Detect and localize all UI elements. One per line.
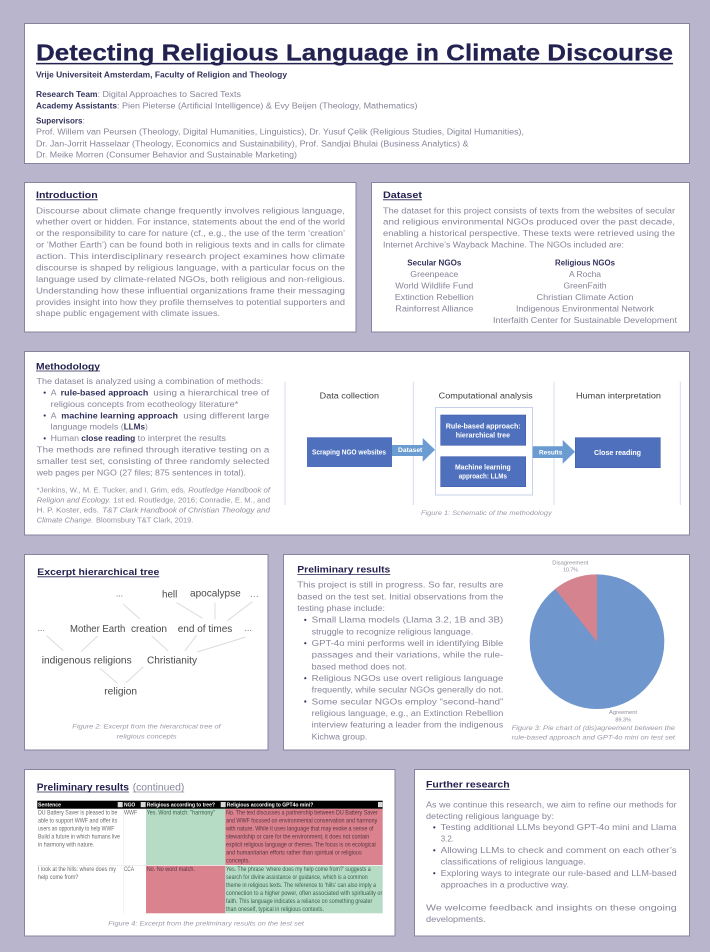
table header (37, 801, 383, 809)
further research text: 3.2. (441, 834, 454, 844)
table row 1: WWF (124, 810, 138, 816)
table row 1: users an opportunity to help WWF (38, 826, 115, 832)
arrow: dataset: Dataset (398, 447, 423, 454)
list: secular NGOs: Rainforrest Alliance (395, 303, 474, 313)
methodology text: A (51, 387, 57, 397)
academy assistants: : Pien Pieterse (Artificial Intelligence) & Evy Beijen (Theology, Mathematics) (117, 100, 418, 110)
chart: methodology schematic (285, 382, 680, 517)
panel: preliminary results continued (24, 770, 395, 936)
container: computational methods (436, 408, 532, 495)
further research text (426, 799, 677, 924)
dataset text: and religious environmental NGOs produced over the past decade, (383, 217, 675, 227)
academy assistants: Academy Assistants (36, 100, 117, 110)
table row 1: and WWF focused on environmental conservation and harmony (226, 818, 377, 824)
table row 1: able to support WWF and offer its (38, 818, 117, 824)
box: close reading (575, 438, 660, 468)
further research text: detecting religious language by: (426, 811, 554, 821)
list: secular NGOs: Extinction Rebellion (395, 292, 474, 302)
caption: figure 3: Figure 3: Pie chart of (dis)agreement between the (512, 725, 675, 732)
list: religious NGOs: Religious NGOs (555, 258, 615, 268)
panel: header (24, 24, 690, 164)
further research text: classifications of religious language. (441, 857, 586, 867)
pie label: disagreement (552, 560, 589, 573)
table row 1: stewardship or care for the environment, it does not contain (226, 834, 369, 840)
introduction text: or ‘Mother Earth’) can be found both in religious texts and in calls for climate (36, 240, 345, 250)
caption: figure 2: religious concepts (117, 733, 177, 740)
introduction text: action. This interdisciplinary research project examines how climate (36, 251, 345, 261)
preliminary results text: Small Llama models (Llama 3.2, 1B and 3B) (312, 615, 503, 625)
table row 1: concepts. (226, 858, 250, 864)
panel: methodology (24, 352, 690, 535)
pie label: disagreement: Disagreement (552, 560, 589, 566)
dataset text (383, 205, 675, 250)
box: machine learning approach: Machine learning (455, 462, 511, 471)
box: rule-based approach (441, 415, 526, 445)
heading: dataset: Dataset (383, 190, 423, 201)
chart: concept tree: indigenous religions (42, 655, 132, 666)
methodology text: close reading (81, 433, 135, 443)
table row 1: explicit religious language or themes. The focus is on ecological (226, 842, 376, 848)
pie label: agreement: 89.3% (615, 717, 631, 723)
table row 2: faith. This language indicates a reliance on something greater (226, 899, 372, 905)
heading: further research: Further research (426, 780, 510, 791)
preliminary results text: passages and their variations, while the rule- (312, 650, 503, 660)
further research text: Testing additional LLMs beyond GPT-4o mini and Llama (441, 822, 677, 832)
table row 2: I look at the hills: where does my (38, 867, 116, 873)
preliminary results text (297, 580, 504, 741)
table row 1: Build a future in which humans live (38, 834, 121, 840)
preliminary results text: GPT-4o mini performs well in identifying Bible (312, 638, 504, 648)
further research text: Exploring ways to integrate our rule-based and LLM-based (441, 868, 677, 878)
introduction text: or the responsibility to care for nature (cf., e.g., the use of the term ‘creation’ (36, 228, 345, 238)
chart: concept tree: ... (244, 623, 252, 634)
caption: figure 1: Figure 1: Schematic of the methodology (421, 510, 552, 517)
table row 1: DU Battery Saver is pleased to be (38, 810, 118, 816)
introduction text: Understanding how these influential organizations frame their messaging (36, 285, 345, 295)
chart: concept tree: end of times (178, 624, 232, 635)
introduction text: Discourse about climate change frequently involves religious language, (36, 205, 345, 215)
methodology text: to interpret the results (138, 433, 226, 443)
supervisors: Dr. Meike Morren (Consumer Behavior and Sustainable Marketing) (36, 150, 297, 160)
list: secular NGOs: World Wildlife Fund (395, 280, 474, 290)
preliminary results text: testing phase include: (297, 603, 385, 613)
preliminary results text: struggle to recognize religious language. (312, 626, 473, 636)
preliminary results text: frequently, while secular NGOs generally do not. (312, 685, 503, 695)
caption: figure 4: Figure 4: Excerpt from the preliminary results on the test set (108, 921, 305, 928)
column label: human interpretation: Human interpretation (576, 390, 661, 400)
chart: concept tree (37, 589, 259, 697)
list: religious NGOs: Christian Climate Action (536, 292, 634, 302)
preliminary results text: Kichwa group. (312, 731, 367, 741)
table header: Religious according to GPT4o mini? (227, 802, 314, 808)
box: machine learning approach: approach: LLMs (459, 472, 507, 481)
supervisors: Prof. Willem van Peursen (Theology, Digital Humanities, Linguistics), Dr. Yusuf Çelik (Religious Studies, Digital Humanities), (36, 127, 524, 137)
pie label: agreement: Agreement (609, 710, 638, 716)
footnote references: *Jenkins, W., M. E. Tucker, and I. Grim, eds. (37, 488, 186, 495)
heading: preliminary results continued: Preliminary results (37, 782, 129, 793)
list: religious NGOs: GreenFaith (564, 280, 607, 290)
list: religious NGOs: A Rocha (569, 269, 601, 279)
preliminary results text: religious language, e.g., an Extinction Rebellion (312, 708, 504, 718)
preliminary results text: Some secular NGOs employ “second-hand” (312, 696, 503, 706)
methodology text: The dataset is analyzed using a combination of methods: (36, 376, 263, 386)
further research text: approaches in a productive way. (441, 880, 569, 890)
footnote references: 1st ed. Routledge, 2016; Conradie, E. M., and (113, 498, 270, 505)
further research text: Allowing LLMs to check and comment on each other’s (441, 845, 677, 855)
caption: figure 3: rule-based approach and GPT-4o mini on test set (512, 734, 676, 741)
box: scraping NGO websites: Scraping NGO websites (312, 447, 386, 456)
chart: concept tree: ... (37, 623, 45, 634)
introduction text: shape public engagement with climate issues. (36, 308, 220, 318)
methodology text: using a hierarchical tree of (153, 387, 270, 397)
footnote references: H. P. Koster, eds. (37, 508, 99, 515)
introduction text (35, 205, 345, 318)
list: religious NGOs: Indigenous Environmental Network (516, 303, 655, 313)
caption: figure 2 (72, 723, 222, 740)
table row 2: than oneself, typical in religious contexts. (226, 907, 324, 913)
arrow: results (533, 440, 575, 464)
methodology text: machine learning approach (61, 410, 178, 420)
box: machine learning approach (441, 457, 526, 487)
pie label: agreement (609, 710, 638, 723)
introduction text: discourse is shaped by religious language, with a particular focus on the (36, 262, 345, 272)
methodology text: Human (51, 433, 79, 443)
supervisors (36, 115, 524, 160)
list: religious NGOs: Interfaith Center for Sustainable Development (493, 315, 678, 325)
affiliation: Vrije Universiteit Amsterdam, Faculty of Religion and Theology (36, 70, 287, 80)
table row 1: and humanitarian efforts rather than spiritual or religious (226, 850, 362, 856)
methodology text: religious concepts from ecotheology literature* (51, 399, 239, 409)
panel: introduction (24, 182, 356, 332)
caption: figure 2: Figure 2: Excerpt from the hierarchical tree of (72, 723, 222, 730)
methodology text: rule-based approach (61, 387, 148, 397)
chart: concept tree: ... (250, 589, 259, 600)
table header: Sentence (38, 802, 61, 808)
dataset text: Internet Archive’s Wayback Machine. The NGOs included are: (383, 240, 624, 250)
panel: preliminary results (284, 554, 690, 750)
heading: methodology: Methodology (36, 361, 101, 372)
supervisors: Dr. Jan-Jorrit Hasselaar (Theology, Economics and Sustainability), Prof. Sandjai Bhulai (Business Analytics) & (36, 138, 469, 148)
further research text: developments. (426, 914, 486, 924)
further research text: We welcome feedback and insights on these ongoing (426, 902, 677, 912)
table: excerpt of results (37, 801, 383, 913)
table header: Religious according to tree? (147, 802, 216, 808)
heading: excerpt hierarchical tree: Excerpt hierarchical tree (37, 567, 159, 578)
table row 1 (38, 810, 378, 864)
footnote references (37, 488, 271, 525)
pie label: disagreement: 10.7% (563, 567, 578, 573)
methodology text: using different large (183, 410, 270, 420)
chart: concept tree: religion (104, 686, 137, 697)
box: rule-based approach: hierarchical tree (456, 430, 510, 439)
column label: data collection: Data collection (320, 390, 379, 400)
heading: introduction: Introduction (36, 190, 98, 201)
box: close reading: Close reading (594, 448, 641, 457)
chart: concept tree: Mother Earth (70, 624, 125, 635)
panel: further research (414, 770, 690, 936)
table row 2: help come from? (38, 875, 79, 881)
dataset text: The dataset for this project consists of texts from the websites of secular (383, 205, 675, 215)
title: Detecting Religious Language in Climate Discourse (36, 40, 673, 66)
methodology text: ) (145, 422, 148, 432)
introduction text: provides insight into how they profile themselves to potential supporters and (36, 297, 345, 307)
research team (36, 89, 241, 99)
footnote references: Routledge Handbook of (188, 488, 271, 495)
research team: Research Team (36, 89, 98, 99)
table row 2: No. No word match. (147, 867, 195, 873)
panel: excerpt hierarchical tree (24, 554, 268, 750)
table row 1: No. The text discusses a partnership between DU Battery Saver (226, 810, 378, 816)
table row 2: Yes. The phrase ‘where does my help come from?’ suggests a (226, 867, 371, 873)
table row 1: Yes. Word match: "harmony" (147, 810, 215, 816)
chart: agreement pie (530, 560, 664, 723)
chart: concept tree: apocalypse (190, 589, 241, 600)
table row 1: in harmony with nature. (38, 842, 95, 848)
footnote references: Religion and Ecology. (37, 498, 111, 505)
table row 2: CCA (124, 867, 134, 873)
table header: NGO (124, 802, 136, 808)
methodology text: LLMs (124, 422, 145, 432)
table row 2: search for divine assistance or guidance, which is a common (226, 875, 368, 881)
research team: : Digital Approaches to Sacred Texts (98, 89, 241, 99)
methodology text: smaller test set, consisting of three randomly selected (37, 456, 270, 466)
further research text: As we continue this research, we aim to refine our methods for (426, 799, 677, 809)
column label: computational analysis: Computational analysis (439, 390, 533, 400)
box: scraping NGO websites (307, 437, 392, 467)
heading: preliminary results continued: (continued) (133, 782, 184, 793)
table row 2: theme in religious texts. The reference to ‘hills’ can also imply a (226, 883, 377, 889)
box: rule-based approach: Rule-based approach: (446, 421, 521, 430)
chart: concept tree: hell (162, 590, 177, 601)
footnote references: Bloomsbury T&T Clark, 2019. (96, 518, 193, 525)
preliminary results text: based method does not. (312, 661, 407, 671)
list: religious NGOs (493, 258, 678, 325)
heading: preliminary results: Preliminary results (297, 565, 390, 576)
chart: concept tree: creation (131, 624, 167, 635)
introduction text: whether overt or hidden. For instance, statements about the end of the world (35, 217, 345, 227)
methodology text: language models ( (51, 422, 124, 432)
methodology text: A (51, 410, 57, 420)
caption: figure 3 (512, 725, 676, 741)
preliminary results text: Religious NGOs use overt religious language (312, 673, 504, 683)
list: secular NGOs: Greenpeace (410, 269, 459, 279)
methodology text: web pages per NGO (27 files; 875 sentences in total). (36, 468, 246, 478)
dataset text: enabling a historical perspective. These texts were retrieved using the (383, 228, 675, 238)
heading: preliminary results continued (37, 782, 184, 793)
footnote references: T&T Clark Handbook of Christian Theology and (102, 508, 271, 515)
arrow: dataset (392, 438, 435, 462)
panel: dataset (372, 182, 690, 332)
supervisors: : (82, 115, 85, 125)
methodology text (36, 376, 270, 478)
chart: concept tree: Christianity (147, 655, 198, 666)
supervisors: Supervisors (36, 115, 83, 125)
table row 2: connection to a higher power, often associated with spirituality or (226, 891, 382, 897)
methodology text: The methods are refined through iterative testing on a (37, 445, 270, 455)
preliminary results text: based on the test set. Initial observations from the (297, 591, 504, 601)
table row 2 (38, 867, 382, 913)
table row 1: with nature. While it uses language that may evoke a sense of (225, 826, 374, 832)
arrow: results: Results (539, 449, 563, 456)
introduction text: language used by climate-related NGOs, both religious and non-religious. (36, 274, 345, 284)
preliminary results text: interview featuring a leader from the indigenous (312, 720, 503, 730)
footnote references: Climate Change. (37, 518, 93, 525)
chart: concept tree: ... (116, 589, 123, 600)
list: secular NGOs: Secular NGOs (407, 258, 462, 268)
list: secular NGOs (395, 258, 474, 313)
preliminary results text: This project is still in progress. So far, results are (297, 580, 504, 590)
